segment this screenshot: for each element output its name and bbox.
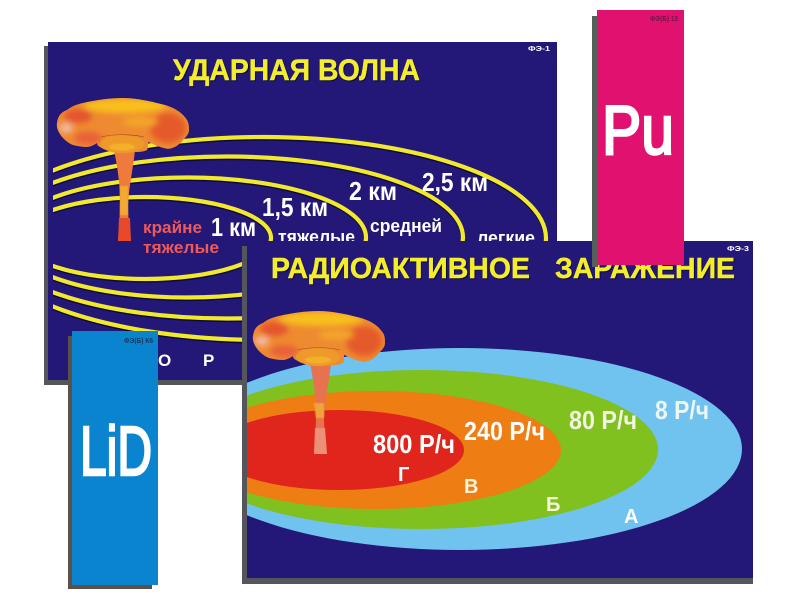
card: LiD bbox=[68, 331, 158, 589]
distance label: 1.5 km: 1,5 км bbox=[262, 192, 328, 222]
zone letter: Г: Г bbox=[398, 464, 409, 486]
symbol: LiD: LiD bbox=[80, 412, 152, 490]
card: Pu bbox=[592, 10, 684, 267]
damage label: extremely severe bbox=[143, 218, 219, 257]
bottom letters: Р bbox=[203, 351, 214, 370]
distance label: 2 km: 2 км bbox=[349, 176, 397, 206]
icon: mushroom cloud bbox=[253, 311, 385, 454]
distance label: 1 km: 1 км bbox=[211, 212, 256, 242]
damage label: medium: тяжести bbox=[370, 235, 442, 255]
zone label: 80 R/h: 80 Р/ч bbox=[569, 405, 637, 435]
icon: mushroom cloud bbox=[57, 98, 189, 241]
concentric shock wave rings bbox=[0, 137, 546, 342]
contamination zones bbox=[247, 348, 742, 550]
zone label: 800 R/h: 800 Р/ч bbox=[373, 429, 455, 459]
damage label: light: легкие bbox=[477, 228, 535, 248]
zone label: 240 R/h: 240 Р/ч bbox=[464, 416, 545, 446]
title: shock wave: УДАРНАЯ ВОЛНА bbox=[173, 54, 420, 87]
code label: Pu card: ФЭ(Б) 13 bbox=[650, 16, 678, 23]
zone letter: Б: Б bbox=[546, 494, 560, 516]
damage label: extremely severe: крайне bbox=[143, 218, 202, 237]
damage label: severe: тяжелые bbox=[278, 227, 355, 247]
zone label: 8 R/h: 8 Р/ч bbox=[655, 395, 709, 425]
code label: shock wave poster: ФЭ-1 bbox=[528, 46, 550, 53]
code label: LiD card: ФЭ(Б) К6 bbox=[124, 338, 153, 345]
panel: radioactive contamination poster bbox=[242, 241, 753, 584]
zone letter: В: В bbox=[464, 476, 478, 498]
bottom letters bbox=[158, 351, 214, 370]
zone letter: А: А bbox=[624, 506, 638, 528]
panel: shock wave poster bbox=[0, 42, 557, 385]
symbol: Pu: Pu bbox=[602, 91, 674, 169]
code label: contamination poster: ФЭ-3 bbox=[727, 246, 749, 253]
damage label: extremely severe: тяжелые bbox=[143, 238, 219, 257]
bottom letters: О bbox=[158, 351, 171, 370]
title: radioactive contamination bbox=[271, 253, 735, 285]
title: radioactive contamination: ЗАРАЖЕНИЕ bbox=[555, 253, 735, 285]
damage label: medium bbox=[370, 216, 442, 255]
damage label: medium: средней bbox=[370, 216, 442, 236]
title: radioactive contamination: РАДИОАКТИВНОЕ bbox=[271, 253, 530, 285]
distance label: 2.5 km: 2,5 км bbox=[422, 167, 488, 197]
